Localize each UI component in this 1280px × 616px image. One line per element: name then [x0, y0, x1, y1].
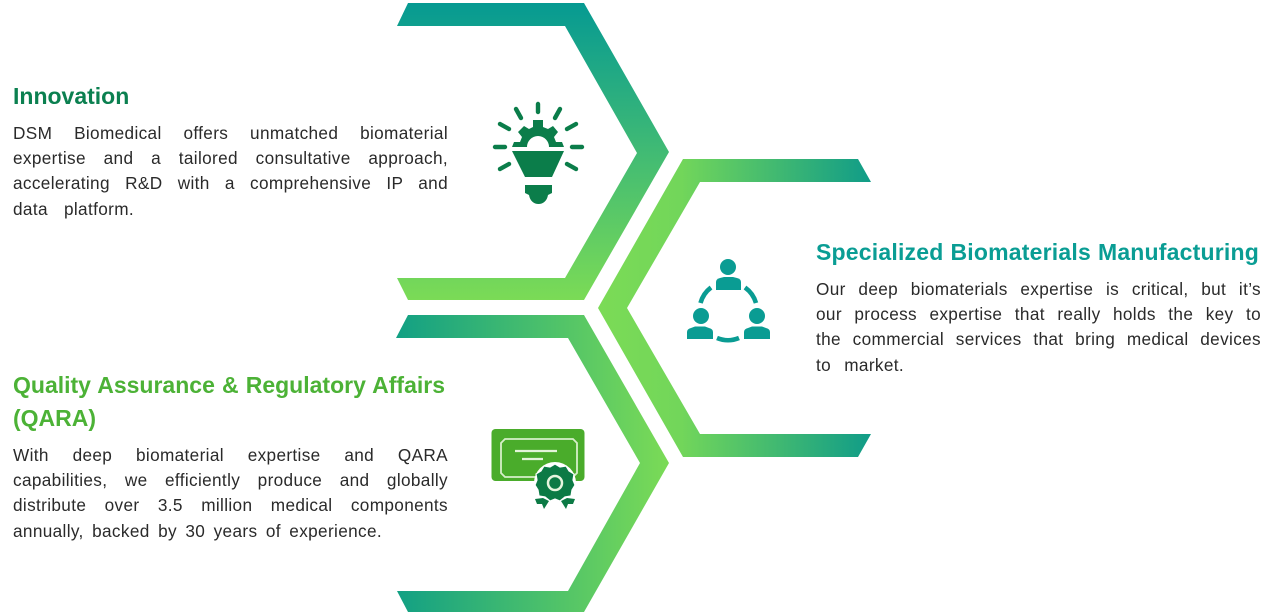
text: QARA description: annually, backed by 30 years of experience. — [13, 521, 382, 541]
text: Manufacturing description: to market. — [816, 355, 904, 375]
icon: three people in a circle — [687, 259, 770, 340]
heading: Quality Assurance & Regulatory Affairs (QARA): (QARA) — [13, 405, 96, 431]
chevron: innovation frame — [397, 3, 669, 300]
text: QARA description: capabilities, we efficiently produce and globally — [13, 470, 448, 490]
heading: Quality Assurance & Regulatory Affairs (QARA) — [13, 372, 445, 431]
text: Innovation description: expertise and a tailored consultative approach, — [13, 148, 448, 168]
icon: certificate with seal — [492, 429, 584, 513]
icon: light bulb with gear — [495, 104, 582, 204]
text: Innovation description: data platform. — [13, 199, 134, 219]
chevron: QARA frame — [396, 315, 669, 612]
chevron: manufacturing frame — [598, 159, 871, 457]
text: Manufacturing description — [816, 279, 1261, 375]
heading: Specialized Biomaterials Manufacturing: Specialized Biomaterials Manufacturing — [816, 239, 1259, 265]
text: Innovation description: accelerating R&D with a comprehensive IP and — [13, 173, 448, 193]
text: Manufacturing description: Our deep biomaterials expertise is critical, but it’s — [816, 279, 1261, 299]
heading: Innovation: Innovation — [13, 83, 129, 109]
text: Innovation description: DSM Biomedical offers unmatched biomaterial — [13, 123, 448, 143]
heading: Quality Assurance & Regulatory Affairs (QARA): Quality Assurance & Regulatory Affairs — [13, 372, 445, 398]
text: Innovation description — [13, 123, 448, 219]
text: QARA description: distribute over 3.5 million medical components — [13, 495, 448, 515]
text: QARA description — [13, 445, 448, 541]
text: Manufacturing description: our process expertise that really holds the key to — [816, 304, 1261, 324]
text: Manufacturing description: the commercial services that bring medical devices — [816, 329, 1261, 349]
text: QARA description: With deep biomaterial expertise and QARA — [13, 445, 448, 465]
